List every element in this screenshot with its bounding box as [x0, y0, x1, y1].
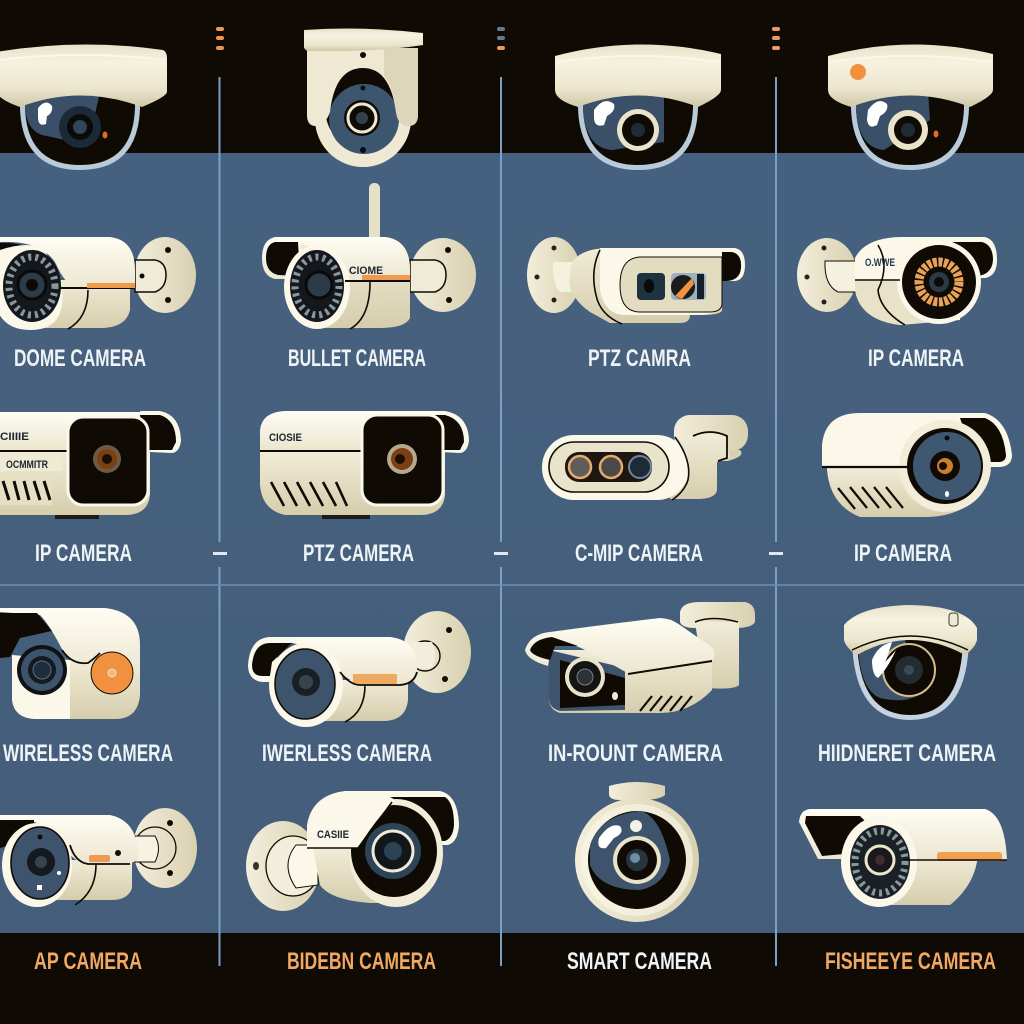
label: IP camera row 1: IP CAMERA: [868, 345, 964, 372]
camera: box row 3 col 2: CIOSIE: [269, 432, 302, 444]
label: PTZ camra: PTZ CAMRA: [588, 345, 691, 372]
camera: dome 4: [828, 44, 993, 170]
label: dome camera: DOME CAMERA: [14, 345, 146, 372]
camera: dome 1: [0, 44, 167, 170]
indicator dashes column 2: [497, 27, 505, 50]
status light: [850, 64, 866, 80]
label: C-MIP camera: C-MIP CAMERA: [575, 540, 703, 567]
camera: dome 3: [555, 44, 721, 170]
camera: bullet with antenna: [262, 183, 476, 329]
bottom dark band: [0, 933, 1024, 1024]
label: bidebn camera: BIDEBN CAMERA: [287, 948, 436, 975]
antenna: [369, 183, 380, 243]
camera: in-mount row 4 col 3: [525, 602, 755, 713]
camera: bullet row 5 col 4: [799, 809, 1007, 907]
camera: IP row 3 col 4: [822, 413, 1012, 517]
camera: box row 3 col 1: CIIIIE: [0, 431, 29, 443]
camera: box row 3 col 1: OCMMITR: [6, 459, 48, 471]
camera: round smart: [575, 782, 699, 922]
label: in-rount camera: IN-ROUNT CAMERA: [548, 740, 723, 767]
camera: IP orange ring: O.WWE: [865, 257, 895, 269]
indicator dashes column 3: [772, 27, 780, 50]
camera: box row 3 col 2: [260, 411, 469, 519]
camera: bullet row 5 col 2: [246, 791, 459, 911]
camera: bullet row 2 col 1: [0, 237, 196, 330]
label: AP camera: AP CAMERA: [34, 948, 142, 975]
label: bullet camera: BULLET CAMERA: [288, 345, 426, 372]
label: IP camera row 2 col 4: IP CAMERA: [854, 540, 952, 567]
camera: turret: [304, 29, 423, 167]
camera: wireless row 4 col 1: [0, 608, 140, 719]
camera: PTZ twin lens: [527, 237, 745, 324]
camera: bullet row 5 col 1: [0, 808, 197, 907]
camera: box row 3 col 1: [0, 411, 181, 519]
indicator dashes column 1: [216, 27, 224, 50]
camera: bullet row 4 col 2: [248, 611, 471, 727]
label: iwerless camera: IWERLESS CAMERA: [262, 740, 432, 767]
camera: dome row 4 col 4: [844, 605, 977, 720]
label: smart camera: SMART CAMERA: [567, 948, 712, 975]
camera: bullet with antenna: CIOME: [349, 265, 383, 277]
top dark band: [0, 0, 1024, 153]
label: wireless camera: WIRELESS CAMERA: [3, 740, 173, 767]
camera: IP orange ring: [797, 237, 997, 325]
label: IP camera row 2 col 1: IP CAMERA: [35, 540, 132, 567]
label: PTZ camera: PTZ CAMERA: [303, 540, 414, 567]
camera: bullet row 5 col 2: CASIIE: [317, 829, 349, 841]
camera: triple lens: [542, 415, 748, 500]
